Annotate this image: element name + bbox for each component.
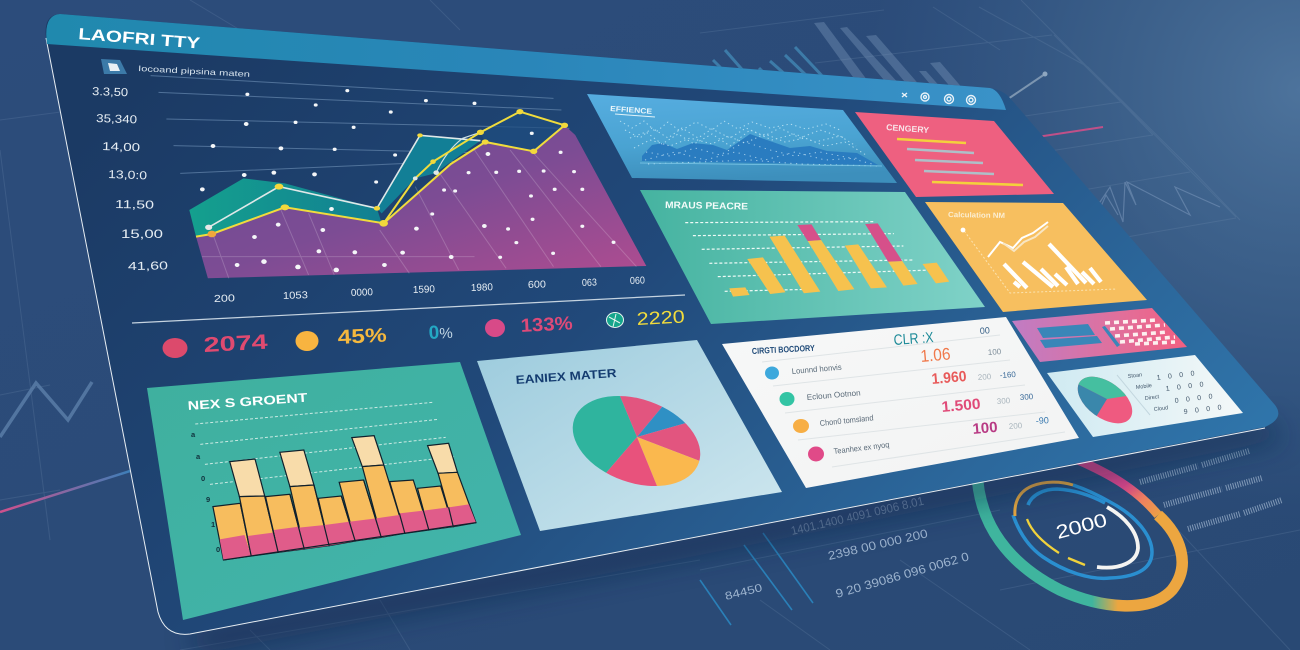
dotted text blocks: [1140, 451, 1282, 529]
table rows: [762, 335, 1065, 467]
decorative pink line: [1037, 127, 1103, 137]
faint numbers under board: 9 20 39086 096 0062 0: [834, 549, 971, 601]
y axis labels: 41,60: [128, 260, 168, 273]
x axis labels: 060: [630, 275, 645, 287]
decorative zigzag left: [0, 382, 92, 437]
calendar cells: [1105, 320, 1175, 344]
row 1: Lounnd honvis: [791, 363, 842, 376]
panel: green stacked bars: [640, 190, 985, 324]
inner blue arc: [1028, 489, 1105, 505]
inner orange arc: [1015, 482, 1073, 516]
series markers: [205, 109, 568, 237]
pie legend: Direct: [1145, 394, 1160, 402]
y axis labels: 14,00: [102, 141, 140, 154]
pink gauge arc: [1078, 460, 1158, 515]
x axis labels: 600: [528, 279, 547, 291]
y axis labels: 3.3,50: [92, 86, 128, 99]
gauge value: 2000: [1054, 510, 1110, 544]
white series line: [209, 135, 480, 227]
chart grid lines: [151, 76, 585, 173]
y axis labels: 15,00: [121, 229, 163, 241]
title: LAOFRI TTY: [78, 26, 201, 53]
KPI divider line: [132, 295, 685, 323]
row 4: [808, 415, 1049, 462]
scatter dots: [200, 89, 616, 272]
main area chart: [151, 76, 646, 278]
x axis labels: 1980: [471, 282, 494, 294]
KPI 45%: 45%: [337, 324, 387, 349]
y axis labels: [92, 86, 168, 273]
KPI 2220: 2220: [636, 307, 685, 329]
panel: small pie: [1047, 350, 1243, 440]
row 3: 300: [997, 396, 1011, 406]
row 2: 200: [978, 372, 992, 382]
blue axis lines: [700, 533, 813, 625]
row 4: 100: [972, 419, 998, 438]
axis ticks: [191, 430, 220, 554]
KPI 0%: 0%: [428, 322, 453, 344]
KPI 133%: 133%: [520, 313, 573, 337]
outer gauge ring: [977, 470, 1182, 606]
header band: [46, 14, 1006, 110]
pie legend: Mobile: [1136, 383, 1152, 391]
faint numbers under board: 1401.1400 4091 0906 8.01: [790, 494, 925, 538]
panel: blue mountain chart: [587, 94, 897, 183]
trend chart: [961, 222, 1117, 293]
x axis labels: 1590: [413, 284, 436, 296]
row 4: Teanhex ex nyoq: [833, 440, 890, 456]
y axis labels: 11,50: [115, 199, 154, 212]
KPI 45%: [296, 324, 387, 351]
legend icon: [101, 59, 127, 74]
panel title: EFFIENCE: [610, 104, 652, 116]
horizontal bars: [897, 139, 1023, 185]
decorative small blue bars: [713, 47, 826, 80]
KPI 2074: [162, 331, 269, 358]
gauge: [977, 460, 1182, 606]
teal area: [189, 178, 382, 237]
x axis labels: 200: [214, 293, 236, 305]
panel: orange trend: [925, 202, 1147, 312]
row 1: [765, 344, 1002, 380]
blue blocks: [1037, 324, 1120, 348]
panel: table: [722, 317, 1079, 488]
KPI 2074: 2074: [203, 331, 269, 357]
faint numbers under board: [724, 494, 971, 603]
row 2: 1.960: [931, 368, 967, 388]
row 1: 100: [988, 347, 1002, 357]
faint numbers under board: 2398 00 000 200: [827, 526, 929, 563]
row 1: 1.06: [920, 344, 951, 366]
KPI 133%: [485, 313, 573, 337]
row 2: -160: [1000, 370, 1017, 380]
axis ticks: 0: [201, 474, 205, 483]
decorative line with node: [1002, 72, 1048, 103]
stacked bars: [195, 402, 476, 560]
purple area: [196, 125, 646, 278]
pie legend: Cloud: [1154, 405, 1169, 413]
decorative pink line left: [0, 471, 130, 512]
row 4: -90: [1035, 415, 1049, 426]
row 4: 200: [1009, 421, 1023, 431]
faint numbers under board: 84450: [724, 582, 764, 603]
decorative zigzag right: [1096, 182, 1220, 222]
inner yellow arc: [1027, 519, 1085, 565]
row 2: [780, 368, 1017, 406]
decorative bars top right: [814, 22, 964, 90]
panel title: CENGERY: [886, 122, 930, 135]
pie legend values: 1 0 0 0: [1165, 381, 1204, 393]
board shadow: [190, 420, 1285, 650]
y axis labels: 13,0:0: [108, 169, 147, 182]
panel: pie chart: [477, 340, 782, 535]
x axis labels: 1053: [283, 290, 309, 302]
purple inner grid: [202, 150, 636, 278]
table column heading: CLR :X: [893, 329, 934, 349]
panel title: Calculation NM: [948, 210, 1005, 220]
pie legend: Stoan: [1128, 372, 1143, 380]
row 3: 300: [1020, 392, 1034, 402]
inner white arc: [1097, 507, 1138, 568]
pie legend values: 1 0 0 0: [1156, 370, 1195, 382]
y axis labels: 35,340: [96, 113, 137, 126]
x axis labels: [214, 275, 645, 305]
pie legend values: [1156, 370, 1222, 416]
pie legend values: 9 0 0 0: [1183, 404, 1222, 416]
inner blue ring: [1013, 485, 1152, 578]
axis ticks: 1: [211, 520, 215, 529]
table title: CIRGTI BOCDORY: [752, 343, 815, 356]
pie legend: [1128, 372, 1169, 413]
row 3: [793, 392, 1034, 433]
pie legend values: 0 0 0 0: [1174, 393, 1213, 405]
axis ticks: 9: [206, 495, 210, 504]
panel: stacked bar chart: [147, 362, 521, 620]
panel: mixed calendar: [1012, 308, 1187, 362]
panel: pink category bars: [855, 112, 1054, 197]
chart subtitle: Iocoand pipsina maten: [138, 64, 250, 79]
KPI row: [162, 307, 685, 358]
axis ticks: a: [196, 452, 201, 461]
upper blue area: [480, 112, 565, 151]
header icons: [902, 93, 976, 104]
row 2: Ecloun Ootnon: [806, 388, 861, 402]
yellow series line: [196, 112, 565, 237]
panel: table: 00: [979, 325, 990, 336]
panel title: NEX S GROENT: [187, 391, 308, 413]
axis ticks: 0: [216, 545, 220, 554]
x axis labels: 063: [582, 277, 597, 289]
panel title: MRAUS PEACRE: [665, 200, 748, 212]
pie chart: [572, 396, 700, 486]
row 3: 1.500: [941, 396, 981, 416]
bar chart: [685, 222, 949, 297]
x axis labels: 0000: [351, 287, 374, 299]
mountain chart: [620, 121, 882, 166]
teal upper area: [377, 135, 480, 213]
row 3: Chon0 tomsland: [819, 413, 874, 428]
axis ticks: a: [191, 430, 196, 439]
panel title: EANIEX MATER: [515, 366, 617, 387]
small pie chart: [1078, 376, 1132, 424]
KPI 2220: [606, 307, 685, 329]
